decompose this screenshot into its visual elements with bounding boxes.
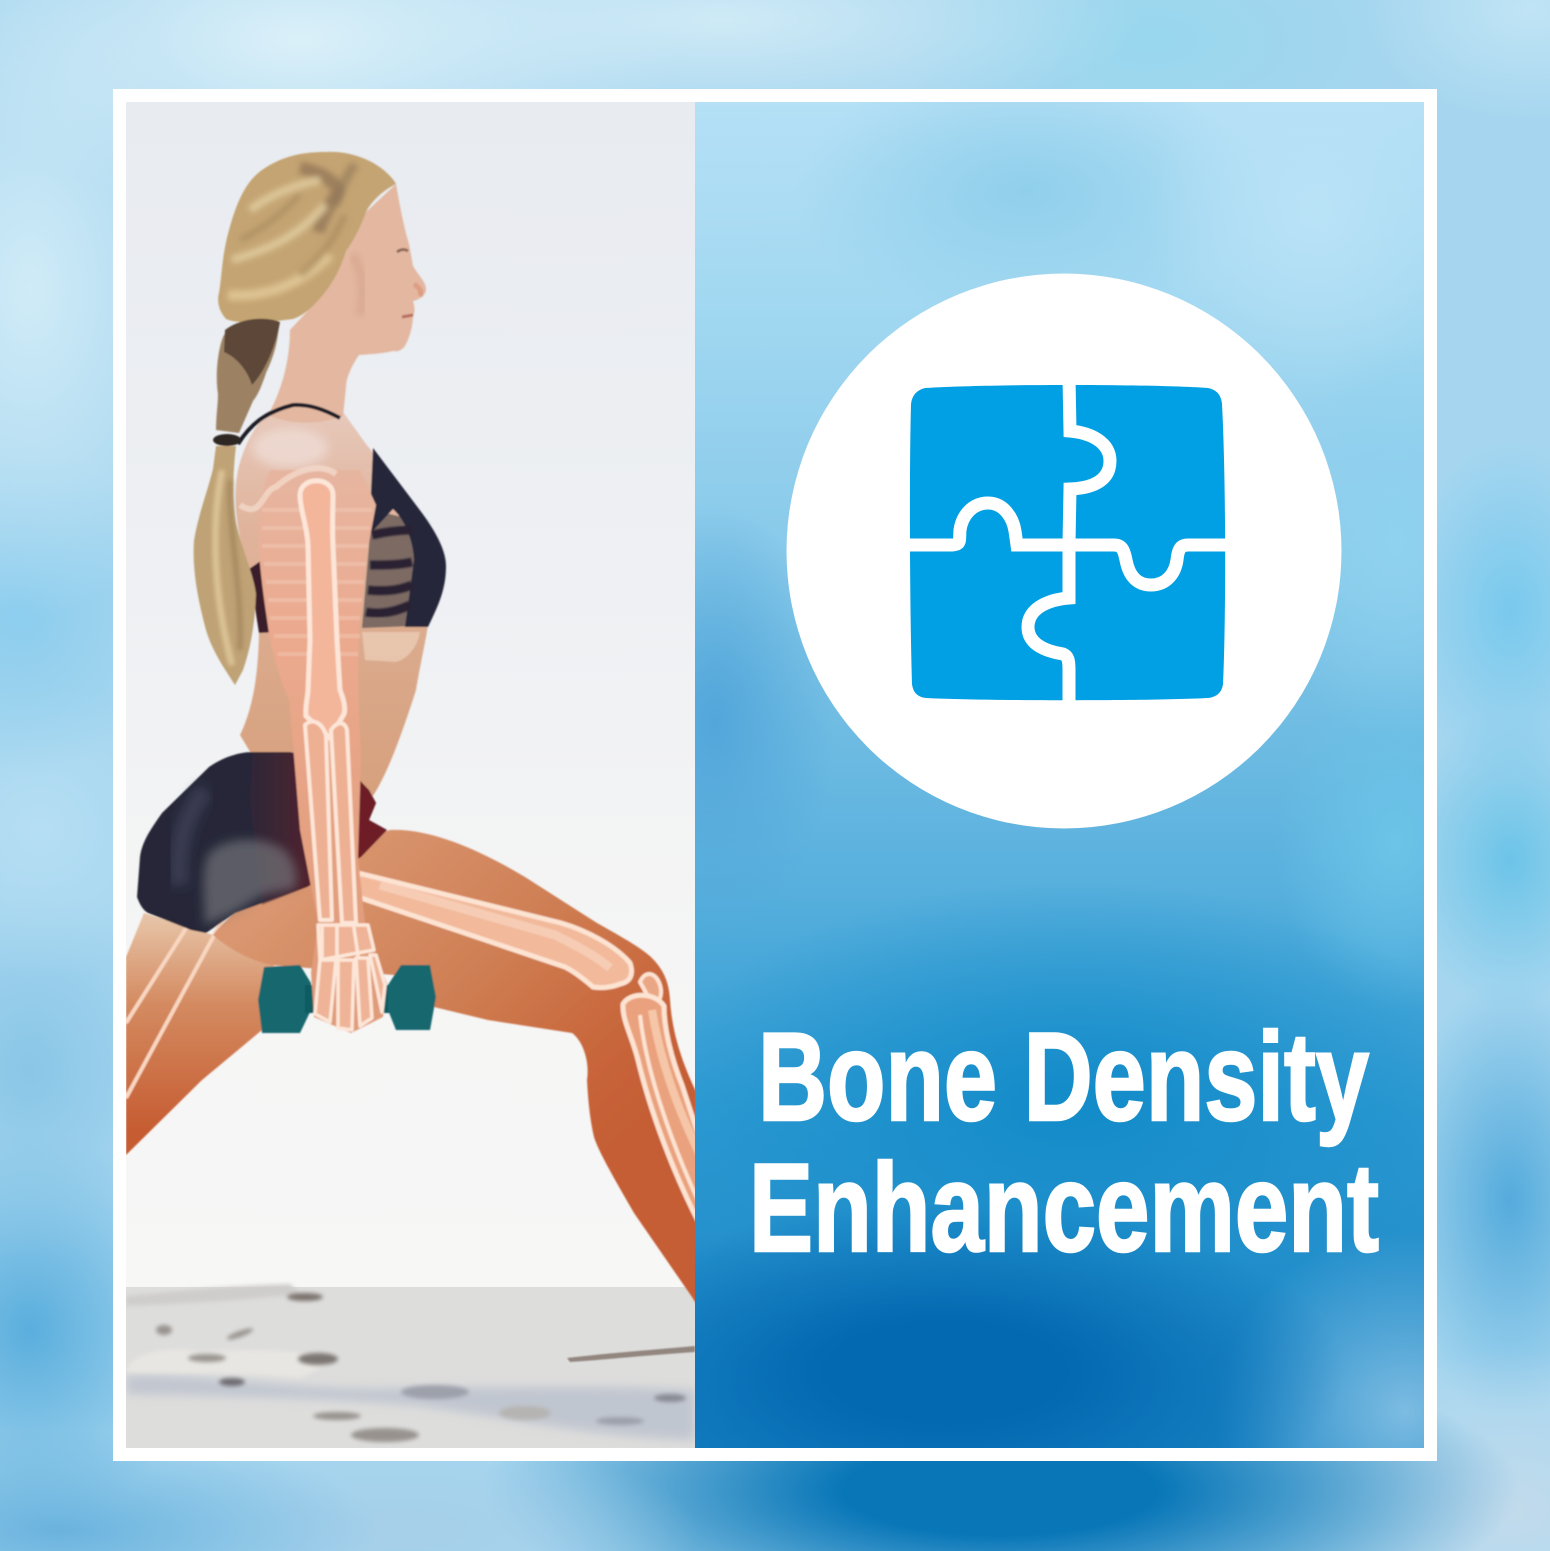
humerus bone (300, 481, 345, 738)
forearm bones (305, 722, 356, 923)
dumbbell (258, 965, 436, 1033)
icon: white circle with blue puzzle (786, 274, 1342, 828)
ponytail (194, 446, 256, 685)
shorts (137, 752, 387, 933)
ponytail strands (215, 470, 240, 665)
torso (234, 412, 428, 797)
upper arm stripes (262, 510, 372, 654)
photo sky (126, 102, 695, 1292)
bra shoulder strap (238, 405, 340, 444)
panel: photo of woman lunging with dumbbells and glowing bones (126, 102, 700, 1448)
lower back bra band (249, 561, 270, 634)
facial details (352, 250, 421, 317)
puzzle seams (903, 378, 1232, 708)
lower ribs below bra (362, 632, 420, 662)
title: Bone Density (758, 1008, 1369, 1147)
white frame (120, 96, 1430, 1454)
neck and face (268, 184, 426, 423)
back leg bones (126, 903, 224, 1098)
rib cage behind bra (362, 510, 415, 628)
back leg (126, 913, 275, 1155)
scapula outline (240, 468, 336, 509)
hair (218, 152, 396, 322)
shoulder highlight (252, 428, 328, 468)
front leg (213, 830, 700, 1310)
hand bones (315, 925, 385, 1030)
pelvis bone overlay (203, 840, 296, 925)
puzzle pieces block (910, 385, 1225, 700)
knee and shin bones (623, 974, 700, 1225)
hair streaks (228, 164, 355, 295)
rib shadows (366, 530, 413, 613)
thigh bone (358, 873, 632, 988)
shorts maroon tint (250, 752, 387, 905)
panel: blue gradient background (695, 102, 1424, 1448)
photo sand with footprints (126, 1284, 695, 1448)
braid dark section (224, 319, 280, 385)
braid (216, 319, 279, 433)
title: Enhancement (749, 1139, 1379, 1278)
sports bra (369, 448, 446, 627)
infographic artwork (113, 89, 1437, 1461)
shorts highlight (179, 790, 205, 885)
arm (258, 470, 387, 1033)
figure (126, 152, 700, 1310)
hair tie (213, 434, 241, 446)
